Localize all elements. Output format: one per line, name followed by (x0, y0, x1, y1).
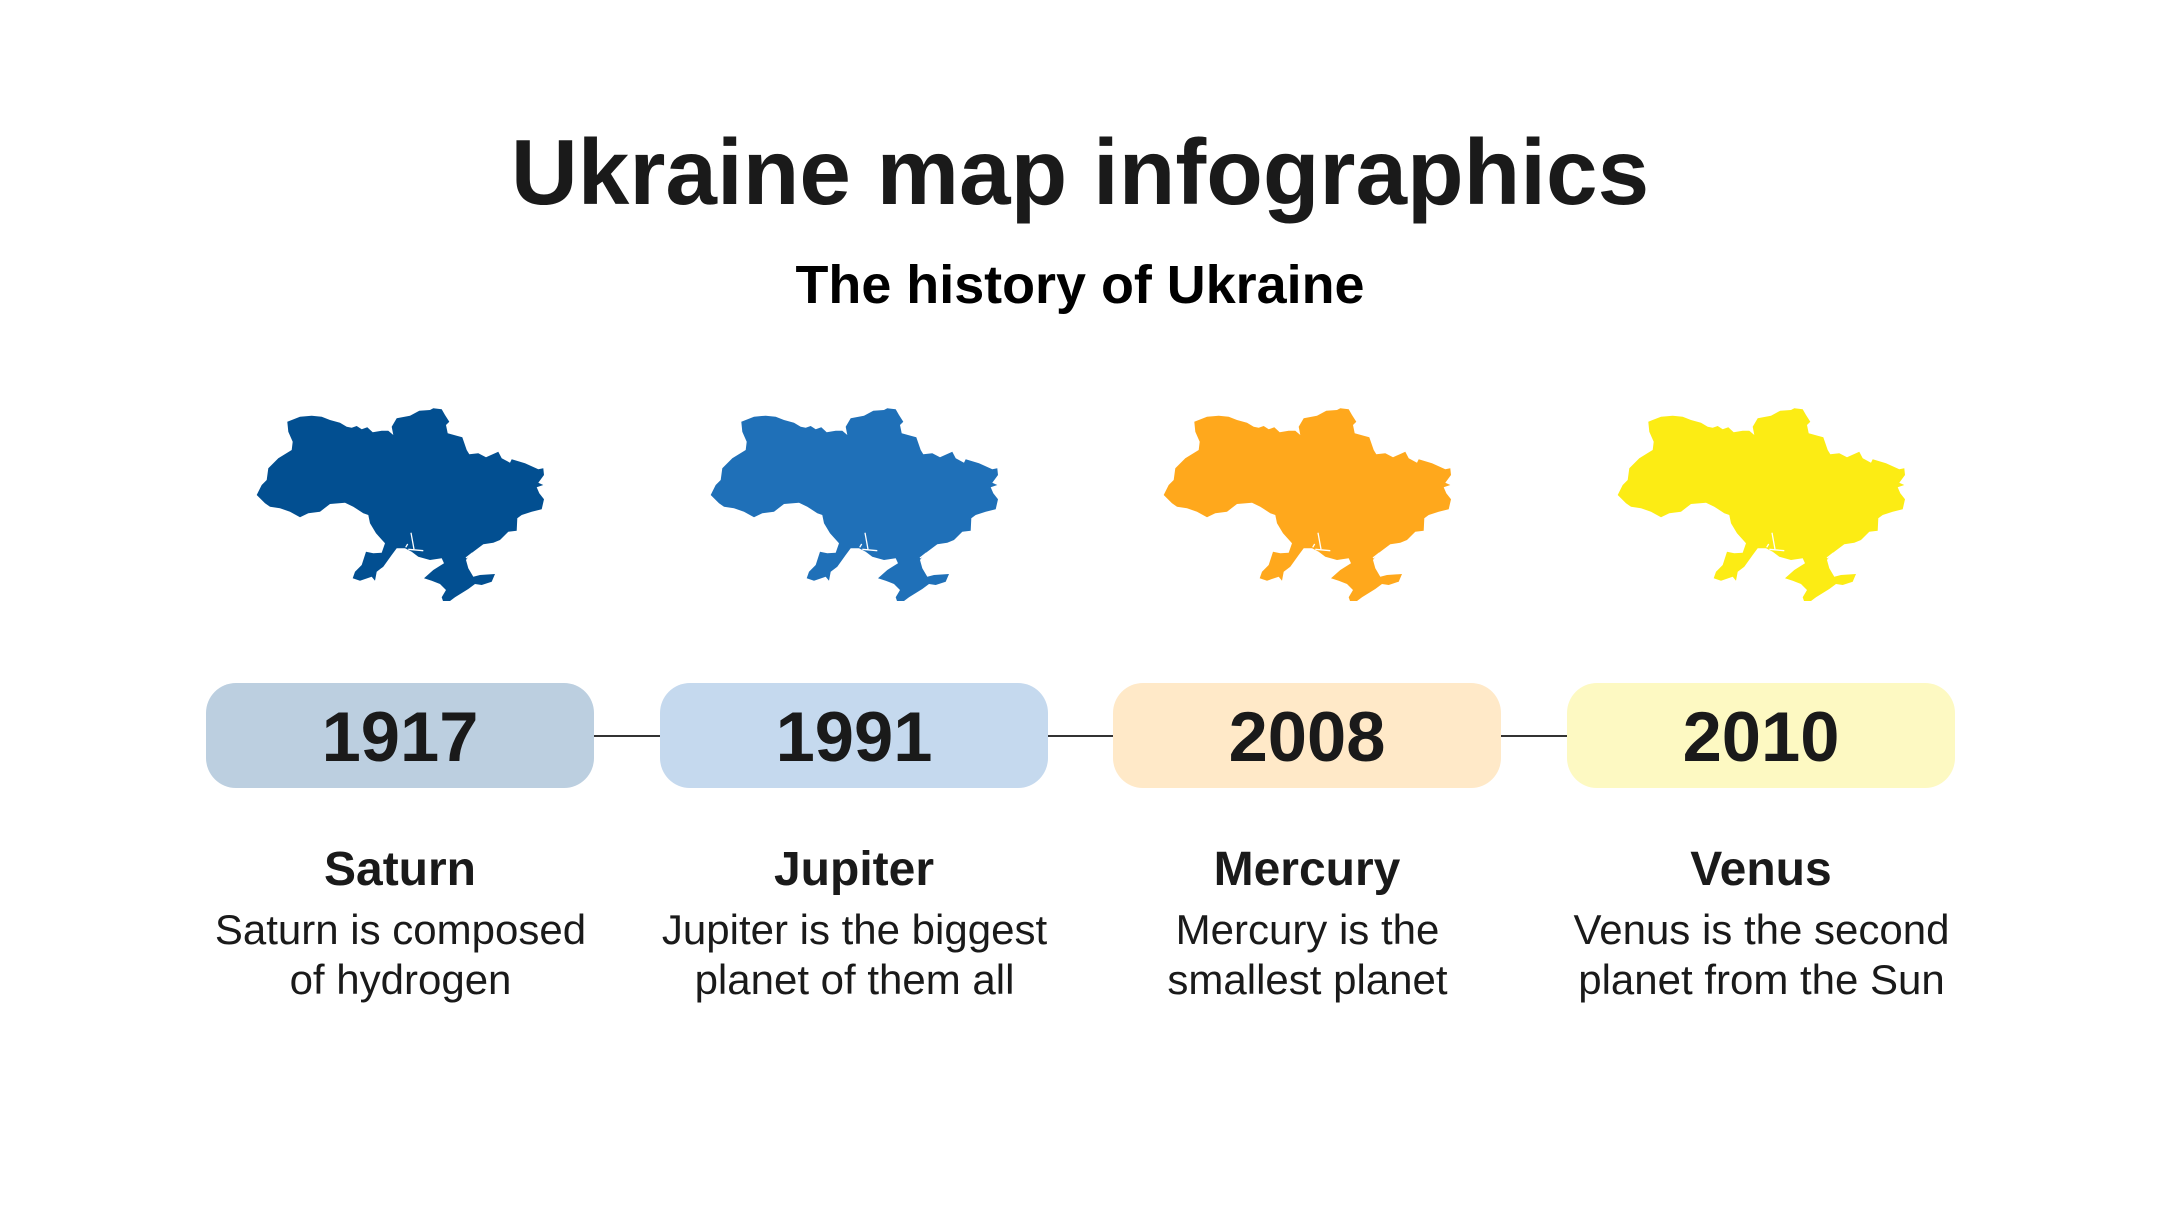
description: Jupiter is the biggest (662, 906, 1047, 952)
year: 2008 (1229, 697, 1385, 776)
icon: Ukraine map orange (1164, 408, 1451, 601)
year box (206, 683, 594, 788)
description (215, 906, 586, 1003)
year: 2010 (1683, 697, 1839, 776)
panel: Jupiter 1991 (660, 408, 1048, 1003)
heading: Venus (1690, 843, 1832, 896)
description: of hydrogen (290, 956, 511, 1003)
icon: Ukraine map yellow (1618, 408, 1905, 601)
connector: 1917 to 1991 (594, 735, 660, 737)
description: Saturn is composed (215, 906, 586, 952)
connector: 1991 to 2008 (1048, 735, 1114, 737)
description (1167, 906, 1448, 1003)
title: Ukraine map infographics (511, 120, 1649, 224)
year box (1567, 683, 1955, 788)
panel: Venus 2010 (1567, 408, 1955, 1003)
description: Venus is the second (1574, 906, 1949, 952)
icon: Ukraine map dark blue (256, 408, 544, 601)
heading: Mercury (1214, 843, 1400, 896)
panel: Mercury 2008 (1113, 408, 1501, 1003)
description: planet from the Sun (1578, 956, 1945, 1003)
description: planet of them all (695, 956, 1014, 1003)
year box (660, 683, 1048, 788)
subtitle: The history of Ukraine (796, 255, 1364, 315)
heading: Saturn (324, 843, 476, 896)
description (662, 906, 1047, 1003)
description: smallest planet (1167, 956, 1448, 1003)
icon: Ukraine map blue (710, 408, 998, 601)
year box (1113, 683, 1501, 788)
connector: 2008 to 2010 (1501, 735, 1567, 737)
year: 1917 (322, 697, 478, 776)
panel: Saturn 1917 (206, 408, 594, 1003)
year: 1991 (776, 697, 932, 776)
description (1574, 906, 1949, 1003)
description: Mercury is the (1176, 906, 1439, 952)
heading: Jupiter (774, 843, 934, 896)
